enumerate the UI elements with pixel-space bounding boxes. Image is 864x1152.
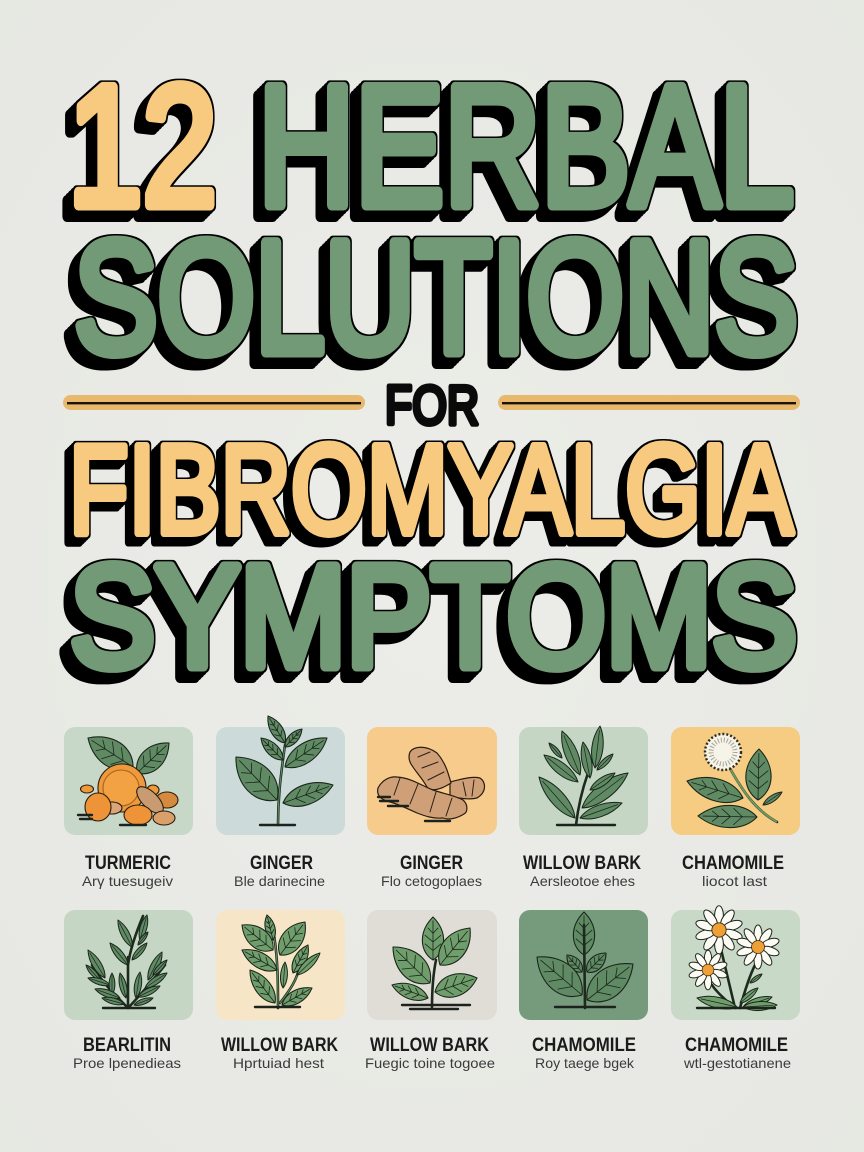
panel: chamomile bloom bbox=[671, 727, 800, 835]
label: WILLOW BARK: Hprtuiad hest bbox=[233, 1055, 324, 1071]
label: BEARLITIN bbox=[73, 1035, 181, 1071]
icon: daisies bbox=[688, 906, 780, 1012]
icon: upright herb bbox=[236, 914, 323, 1011]
label: GINGER bbox=[381, 853, 482, 889]
panel: ginger plant bbox=[216, 713, 345, 835]
label: CHAMOMILE: Roy taege bgek bbox=[535, 1055, 635, 1071]
label: CHAMOMILE: wtl-gestotianene bbox=[683, 1055, 791, 1071]
label: CHAMOMILE bbox=[682, 853, 784, 889]
panel: willow bark grey bbox=[367, 910, 497, 1020]
label: TURMERIC bbox=[82, 853, 173, 889]
label: GINGER: GINGER bbox=[250, 853, 313, 874]
panel: willow bark cream bbox=[216, 910, 345, 1020]
label: BEARLITIN: BEARLITIN bbox=[83, 1035, 171, 1056]
icon: willow sprig bbox=[534, 725, 633, 825]
label: WILLOW BARK bbox=[365, 1035, 495, 1071]
label: CHAMOMILE: CHAMOMILE bbox=[682, 853, 784, 874]
label: WILLOW BARK: WILLOW BARK bbox=[221, 1035, 338, 1056]
label: CHAMOMILE: CHAMOMILE bbox=[685, 1035, 788, 1056]
label: WILLOW BARK: Fuegic toine togoee bbox=[365, 1055, 495, 1071]
label: TURMERIC: Arγ tuesugeiv bbox=[82, 873, 173, 889]
label: GINGER bbox=[234, 853, 325, 889]
divider: left rule bbox=[63, 395, 365, 410]
title bbox=[63, 51, 800, 697]
panel: bearlitin bbox=[64, 910, 193, 1020]
label: WILLOW BARK: WILLOW BARK bbox=[523, 853, 641, 874]
title word: FOR: FOR bbox=[385, 374, 479, 436]
label: WILLOW BARK: Aersleotoe ehes bbox=[530, 873, 635, 889]
icon: white flower with leaves bbox=[684, 734, 784, 828]
icon: ginger root bbox=[378, 747, 485, 821]
icon: serrated leaf bbox=[528, 912, 642, 1011]
label: CHAMOMILE: liocot last bbox=[702, 873, 767, 889]
label: WILLOW BARK: WILLOW BARK bbox=[370, 1035, 489, 1056]
panel: ginger root bbox=[367, 727, 497, 835]
title line: 12 HERBAL bbox=[68, 51, 794, 242]
icon: ginger plant bbox=[225, 713, 336, 825]
label: CHAMOMILE bbox=[532, 1035, 636, 1071]
icon: broad leaf herb bbox=[384, 917, 480, 1009]
panel: chamomile dark bbox=[519, 910, 648, 1020]
label: BEARLITIN: Proe lpenedieas bbox=[73, 1055, 181, 1071]
icon: turmeric root and leaves bbox=[78, 727, 178, 825]
label: TURMERIC: TURMERIC bbox=[85, 853, 171, 874]
label: GINGER: Flo cetogoplaes bbox=[381, 873, 482, 889]
label: GINGER: Ble darinecine bbox=[234, 873, 325, 889]
label: CHAMOMILE: CHAMOMILE bbox=[532, 1035, 636, 1056]
icon: bushy herb bbox=[84, 914, 169, 1008]
title line: 12 HERBAL: 12 bbox=[68, 51, 217, 242]
panel: willow bark bbox=[519, 725, 648, 835]
label: WILLOW BARK bbox=[221, 1035, 338, 1071]
panel: chamomile flowers bbox=[671, 906, 800, 1020]
label: CHAMOMILE bbox=[683, 1035, 791, 1071]
label: WILLOW BARK bbox=[523, 853, 641, 889]
label: GINGER: GINGER bbox=[400, 853, 463, 874]
divider: right rule bbox=[498, 395, 800, 410]
panel: turmeric bbox=[64, 727, 193, 835]
